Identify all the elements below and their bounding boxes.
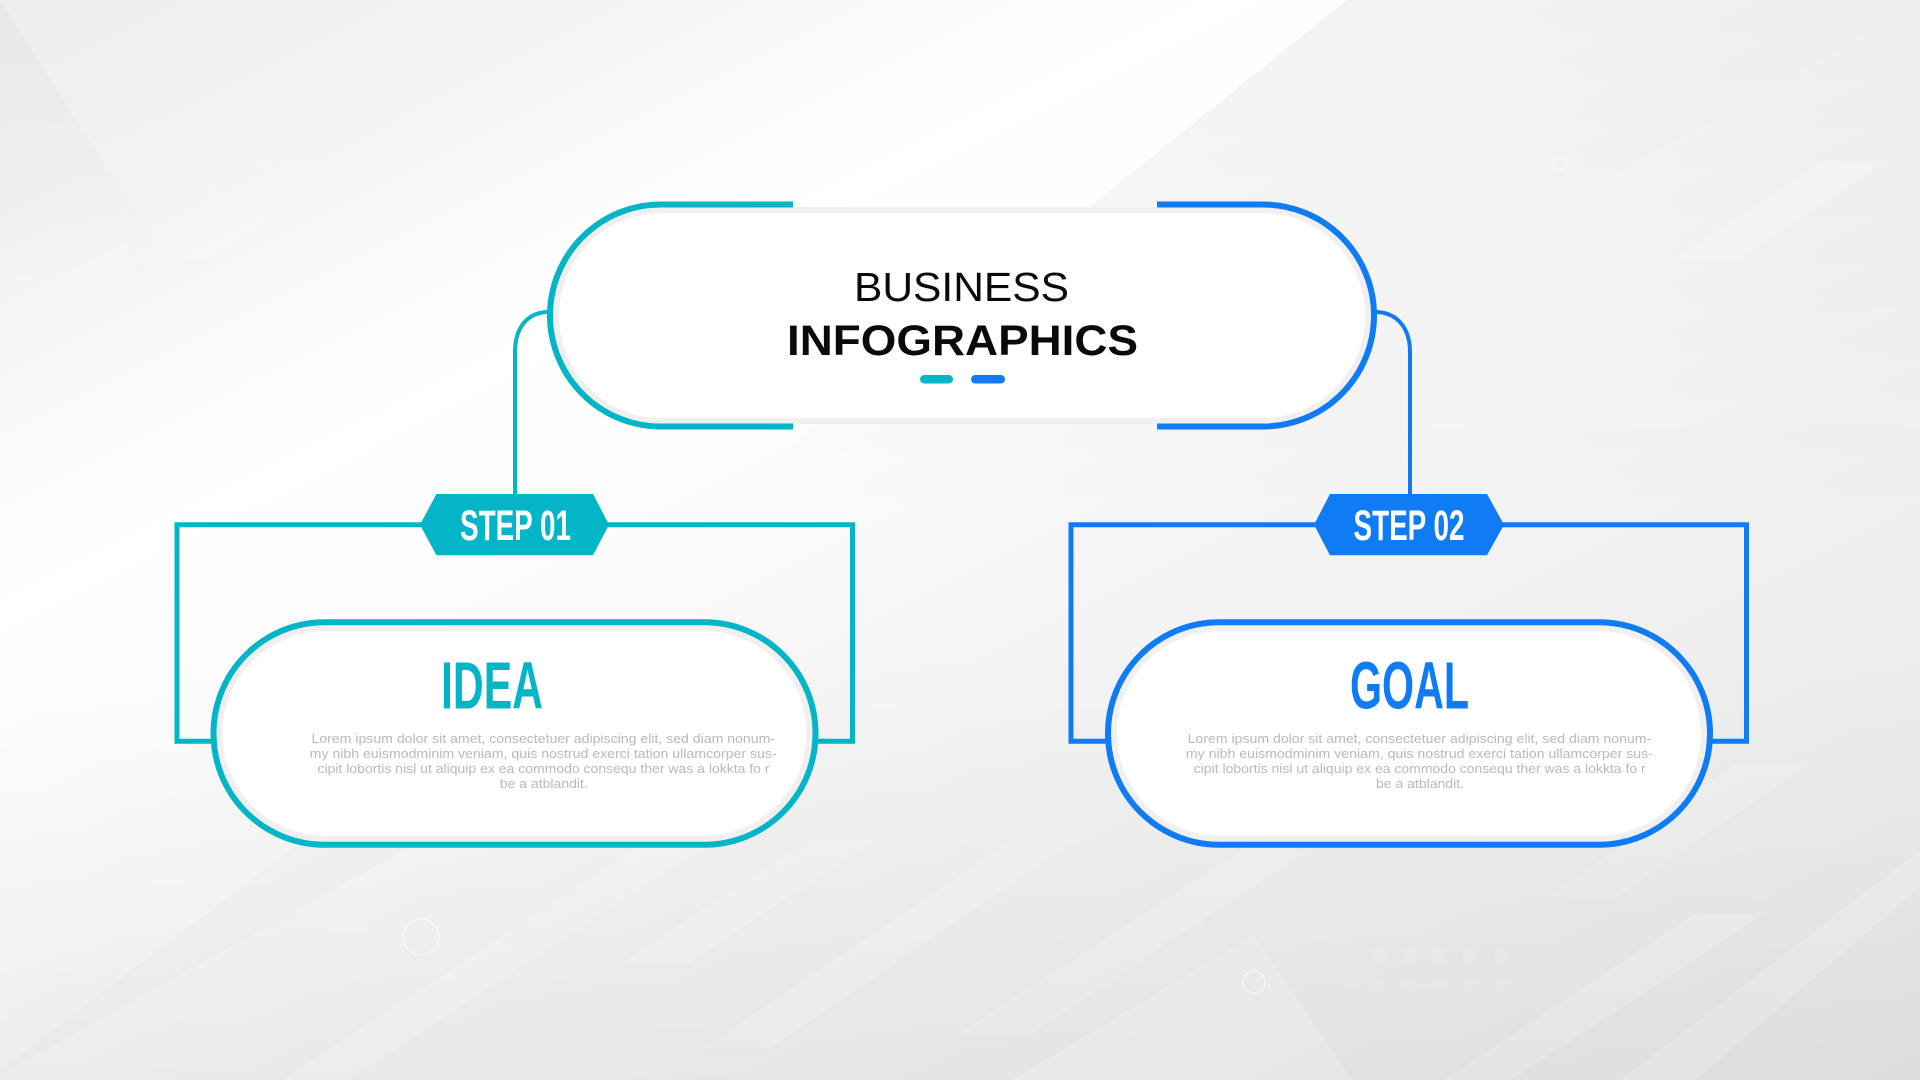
header outline: teal half [550, 204, 793, 426]
connector: header to step 02 [1375, 312, 1410, 496]
idea heading: IDEA [441, 648, 543, 724]
step 01 badge: STEP 01 [460, 502, 571, 550]
step 02 badge: STEP 02 [1354, 502, 1464, 550]
panel: header pill [550, 204, 1374, 426]
goal body text: my nibh euismodminim veniam, quis nostrud exerci tation ullamcorper sus- [1186, 746, 1653, 761]
title line 1: BUSINESS [854, 264, 1069, 310]
step 02 frame [1071, 525, 1746, 741]
accent dash: teal [920, 375, 953, 384]
idea pill [214, 622, 816, 845]
header outline: blue half [1157, 204, 1374, 426]
title line 2: INFOGRAPHICS [787, 317, 1138, 365]
idea body text: be a atblandit. [500, 776, 588, 791]
idea body text: my nibh euismodminim veniam, quis nostrud exerci tation ullamcorper sus- [310, 746, 777, 761]
goal pill [1108, 622, 1710, 845]
idea body text: cipit lobortis nisl ut aliquip ex ea commodo consequ ther was a lokkta fo r [318, 761, 770, 776]
connector: header to step 01 [515, 312, 549, 496]
step 02 badge [1314, 494, 1504, 555]
goal body text: Lorem ipsum dolor sit amet, consectetuer adipiscing elit, sed diam nonum- [1188, 731, 1651, 746]
goal body text [1186, 731, 1653, 791]
step 01 badge [420, 494, 609, 555]
panel: step 02 goal [1071, 494, 1746, 845]
goal heading: GOAL [1350, 648, 1469, 724]
idea body text: Lorem ipsum dolor sit amet, consectetuer adipiscing elit, sed diam nonum- [312, 731, 775, 746]
goal body text: cipit lobortis nisl ut aliquip ex ea commodo consequ ther was a lokkta fo r [1194, 761, 1646, 776]
accent dash: blue [971, 375, 1005, 384]
panel: step 01 idea [177, 494, 852, 845]
idea body text [310, 731, 777, 791]
step 01 frame [177, 525, 852, 741]
goal body text: be a atblandit. [1376, 776, 1464, 791]
